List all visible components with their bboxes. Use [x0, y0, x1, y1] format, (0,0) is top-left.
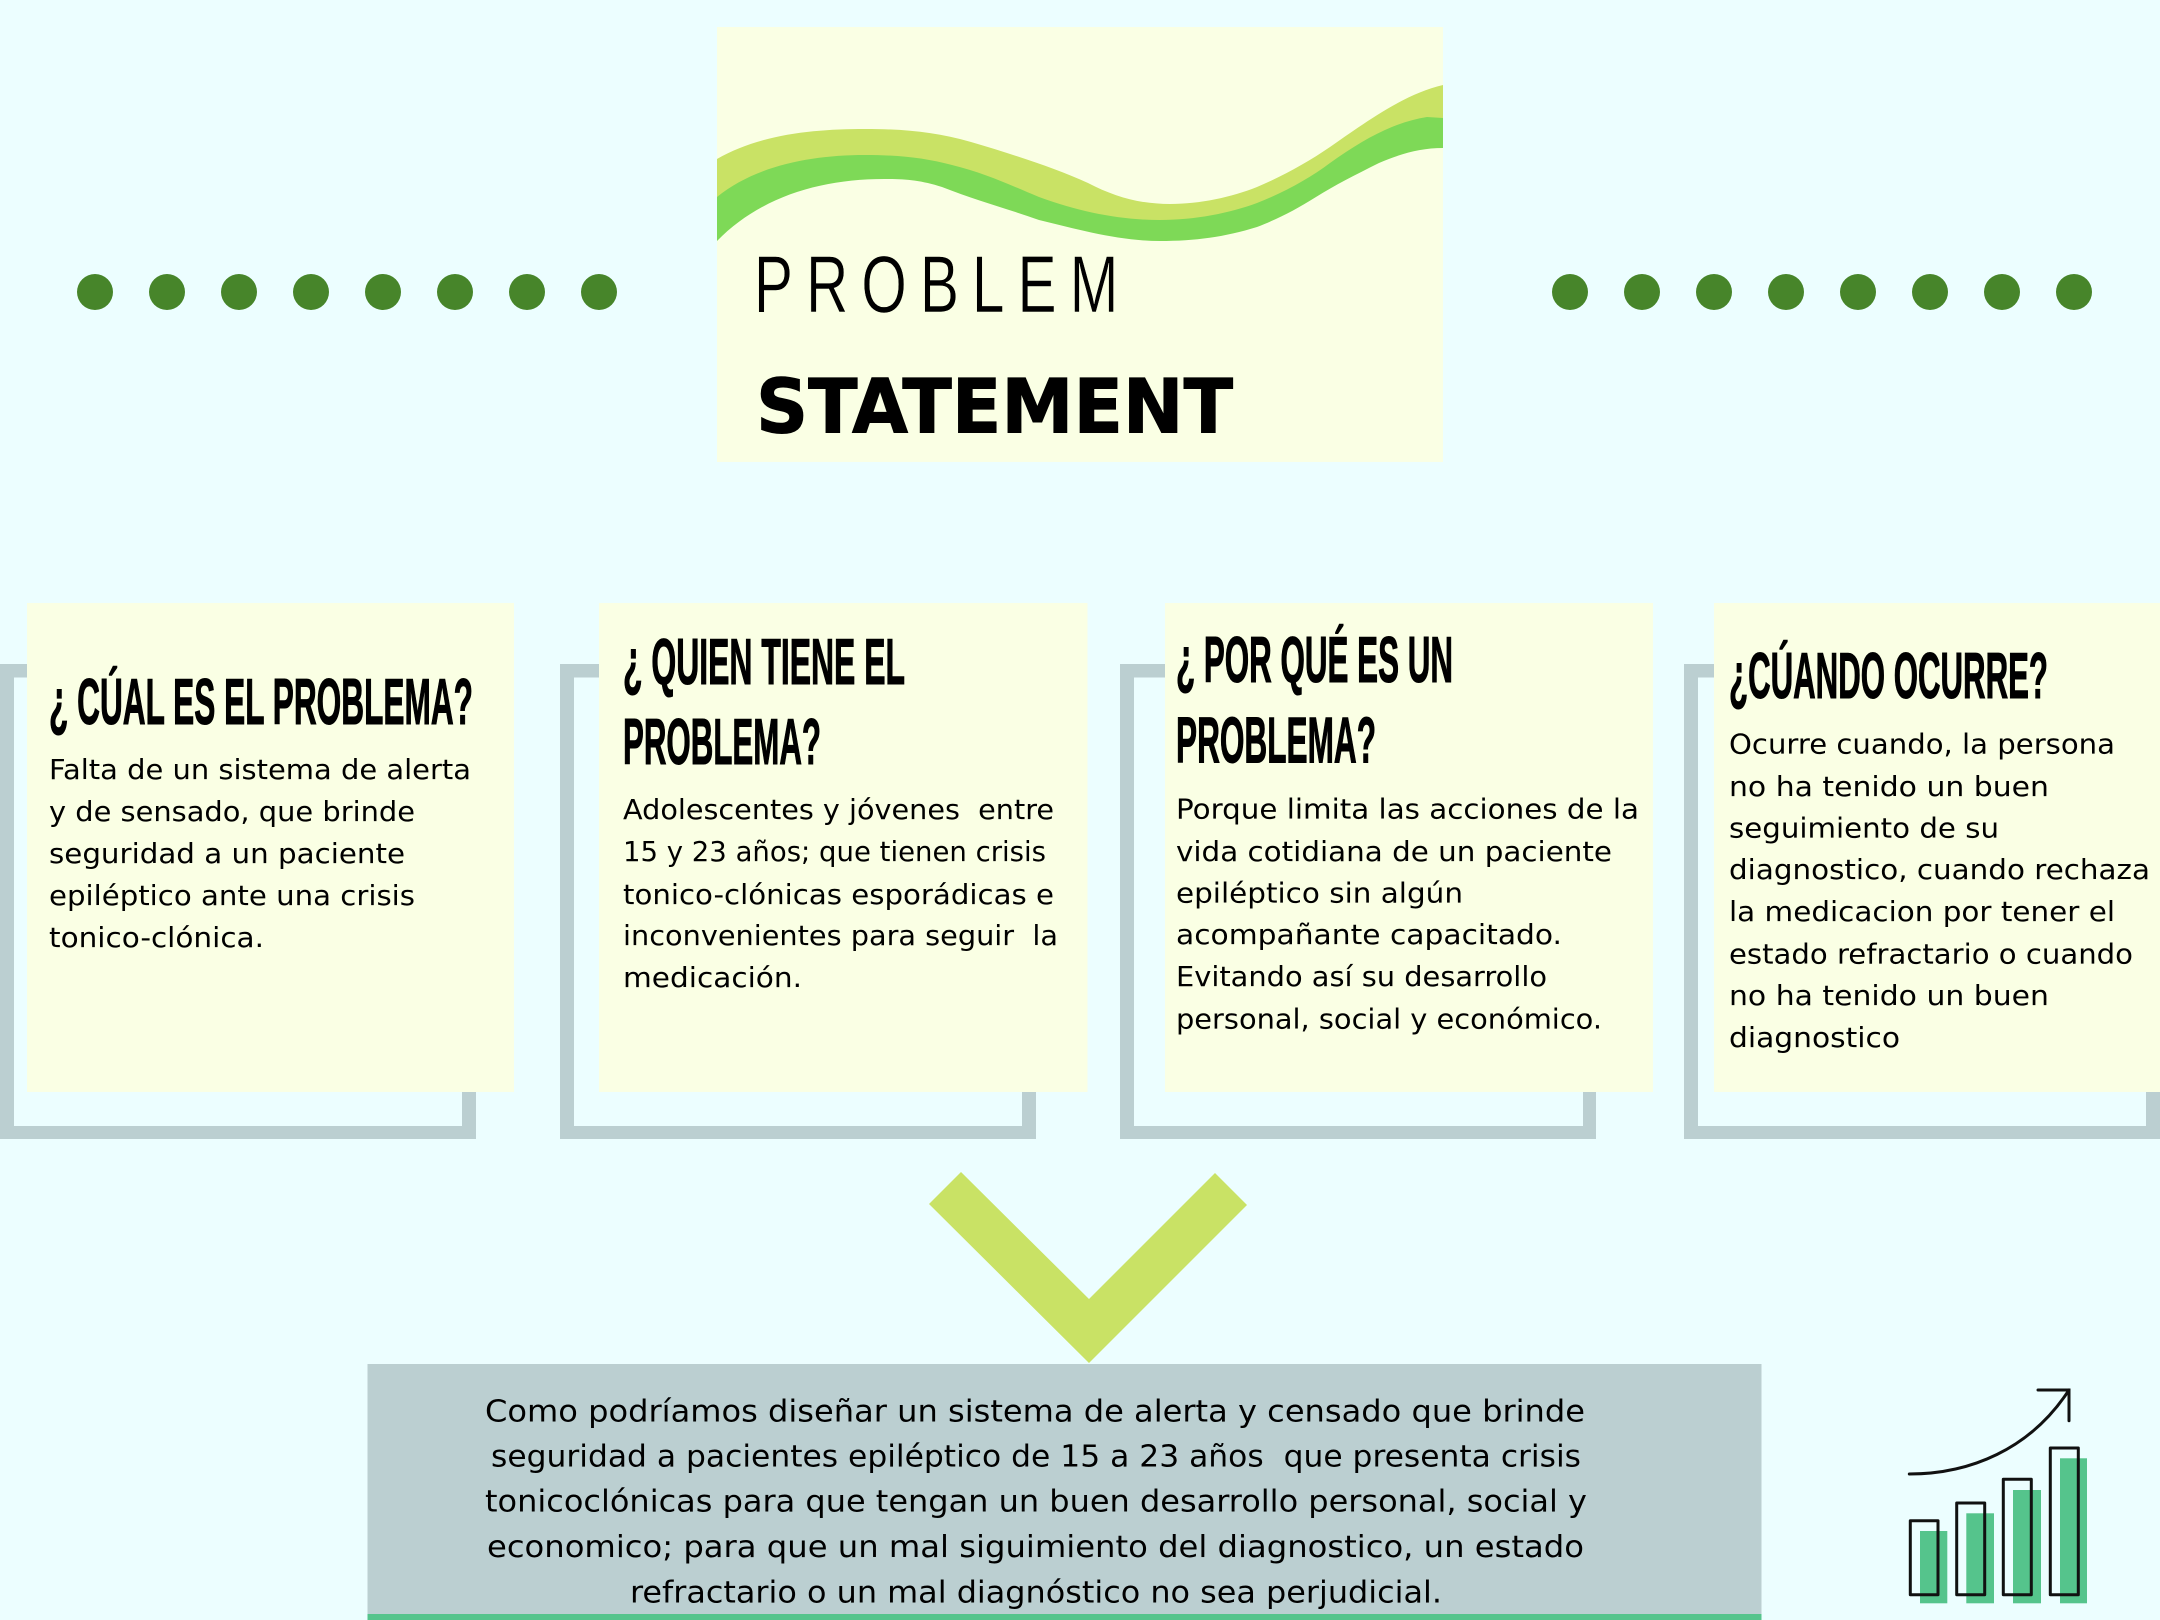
body card 2 — [623, 793, 1058, 994]
conclusion text: tonicoclónicas para que tengan un buen desarrollo personal, social y — [485, 1484, 1587, 1520]
conclusion text: refractario o un mal diagnóstico no sea perjudicial. — [630, 1576, 1442, 1610]
body card 3: epiléptico sin algún — [1176, 876, 1463, 910]
body card 2: 15 y 23 años; que tienen crisis — [623, 835, 1046, 868]
body card 2: inconvenientes para seguir la — [623, 919, 1058, 952]
heading card 3 — [1176, 623, 1453, 776]
panel: card 3 why is it a problem: ¿ POR QUÉ ES UN — [1176, 623, 1453, 696]
panel: card 2 who has the problem: ¿ QUIEN TIENE EL — [623, 625, 905, 698]
body card 1: epiléptico ante una crisis — [49, 879, 415, 912]
heading card 2: PROBLEMA? — [623, 705, 821, 778]
arrow: chevron down — [929, 1172, 1247, 1363]
panel: title — [717, 27, 1443, 462]
conclusion text: Como podríamos diseñar un sistema de alerta y censado que brinde — [485, 1394, 1585, 1430]
wave: green band — [717, 117, 1443, 241]
wave: light green band — [717, 85, 1443, 230]
bracket: card 4 — [1684, 664, 2160, 1139]
body card 3: vida cotidiana de un paciente — [1176, 835, 1612, 868]
body card 1: y de sensado, que brinde — [49, 795, 415, 828]
growth arrow — [1909, 1390, 2069, 1474]
body card 3: acompañante capacitado. — [1176, 918, 1562, 951]
panel: conclusion — [368, 1364, 1762, 1620]
panel: card 4 when does it occur — [1714, 603, 2160, 1092]
body card 2: Adolescentes y jóvenes entre — [623, 793, 1054, 826]
dots: right row — [1552, 274, 2092, 310]
panel: card 1 what is the problem: ¿ CÚAL ES EL PROBLEMA? — [49, 665, 473, 738]
panel: card 3 why is it a problem — [1165, 603, 1653, 1092]
title line 1: PROBLEM — [754, 239, 1118, 329]
dots: left row — [77, 274, 617, 310]
icon: growth chart — [1909, 1390, 2087, 1603]
body card 4: diagnostico, cuando rechaza — [1729, 853, 2150, 886]
body card 4: la medicacion por tener el — [1729, 895, 2115, 928]
conclusion text — [485, 1394, 1587, 1610]
body card 4: Ocurre cuando, la persona — [1729, 728, 2115, 760]
body card 4: no ha tenido un buen — [1729, 979, 2049, 1012]
body card 4 — [1729, 728, 2150, 1054]
body card 2: tonico-clónicas esporádicas e — [623, 878, 1054, 911]
body card 1: seguridad a un paciente — [49, 837, 405, 870]
body card 4: estado refractario o cuando — [1729, 938, 2133, 970]
body card 3: personal, social y económico. — [1176, 1002, 1602, 1036]
green bars — [1920, 1458, 2087, 1603]
body card 2: medicación. — [623, 961, 802, 994]
panel: card 1 what is the problem — [27, 603, 514, 1092]
body card 4: seguimiento de su — [1729, 812, 1999, 844]
body card 3: Evitando así su desarrollo — [1176, 960, 1547, 993]
conclusion text: economico; para que un mal siguimiento del diagnostico, un estado — [487, 1530, 1584, 1565]
bracket: card 3 — [1120, 664, 1596, 1139]
accent bar — [368, 1614, 1762, 1620]
conclusion text: seguridad a pacientes epiléptico de 15 a 23 años que presenta crisis — [491, 1440, 1581, 1474]
title line 2: STATEMENT — [756, 362, 1233, 450]
outlined bars — [1910, 1448, 2078, 1595]
heading card 3: PROBLEMA? — [1176, 704, 1376, 776]
bracket: card 2 — [560, 664, 1036, 1139]
body card 1 — [49, 753, 471, 954]
heading card 2 — [623, 625, 905, 778]
panel: card 2 who has the problem — [599, 603, 1088, 1092]
body card 3 — [1176, 792, 1639, 1036]
bracket: card 1 — [0, 664, 476, 1139]
body card 3: Porque limita las acciones de la — [1176, 792, 1639, 826]
body card 1: tonico-clónica. — [49, 921, 264, 954]
body card 1: Falta de un sistema de alerta — [49, 753, 471, 786]
body card 4: diagnostico — [1729, 1021, 1900, 1054]
body card 4: no ha tenido un buen — [1729, 770, 2049, 803]
